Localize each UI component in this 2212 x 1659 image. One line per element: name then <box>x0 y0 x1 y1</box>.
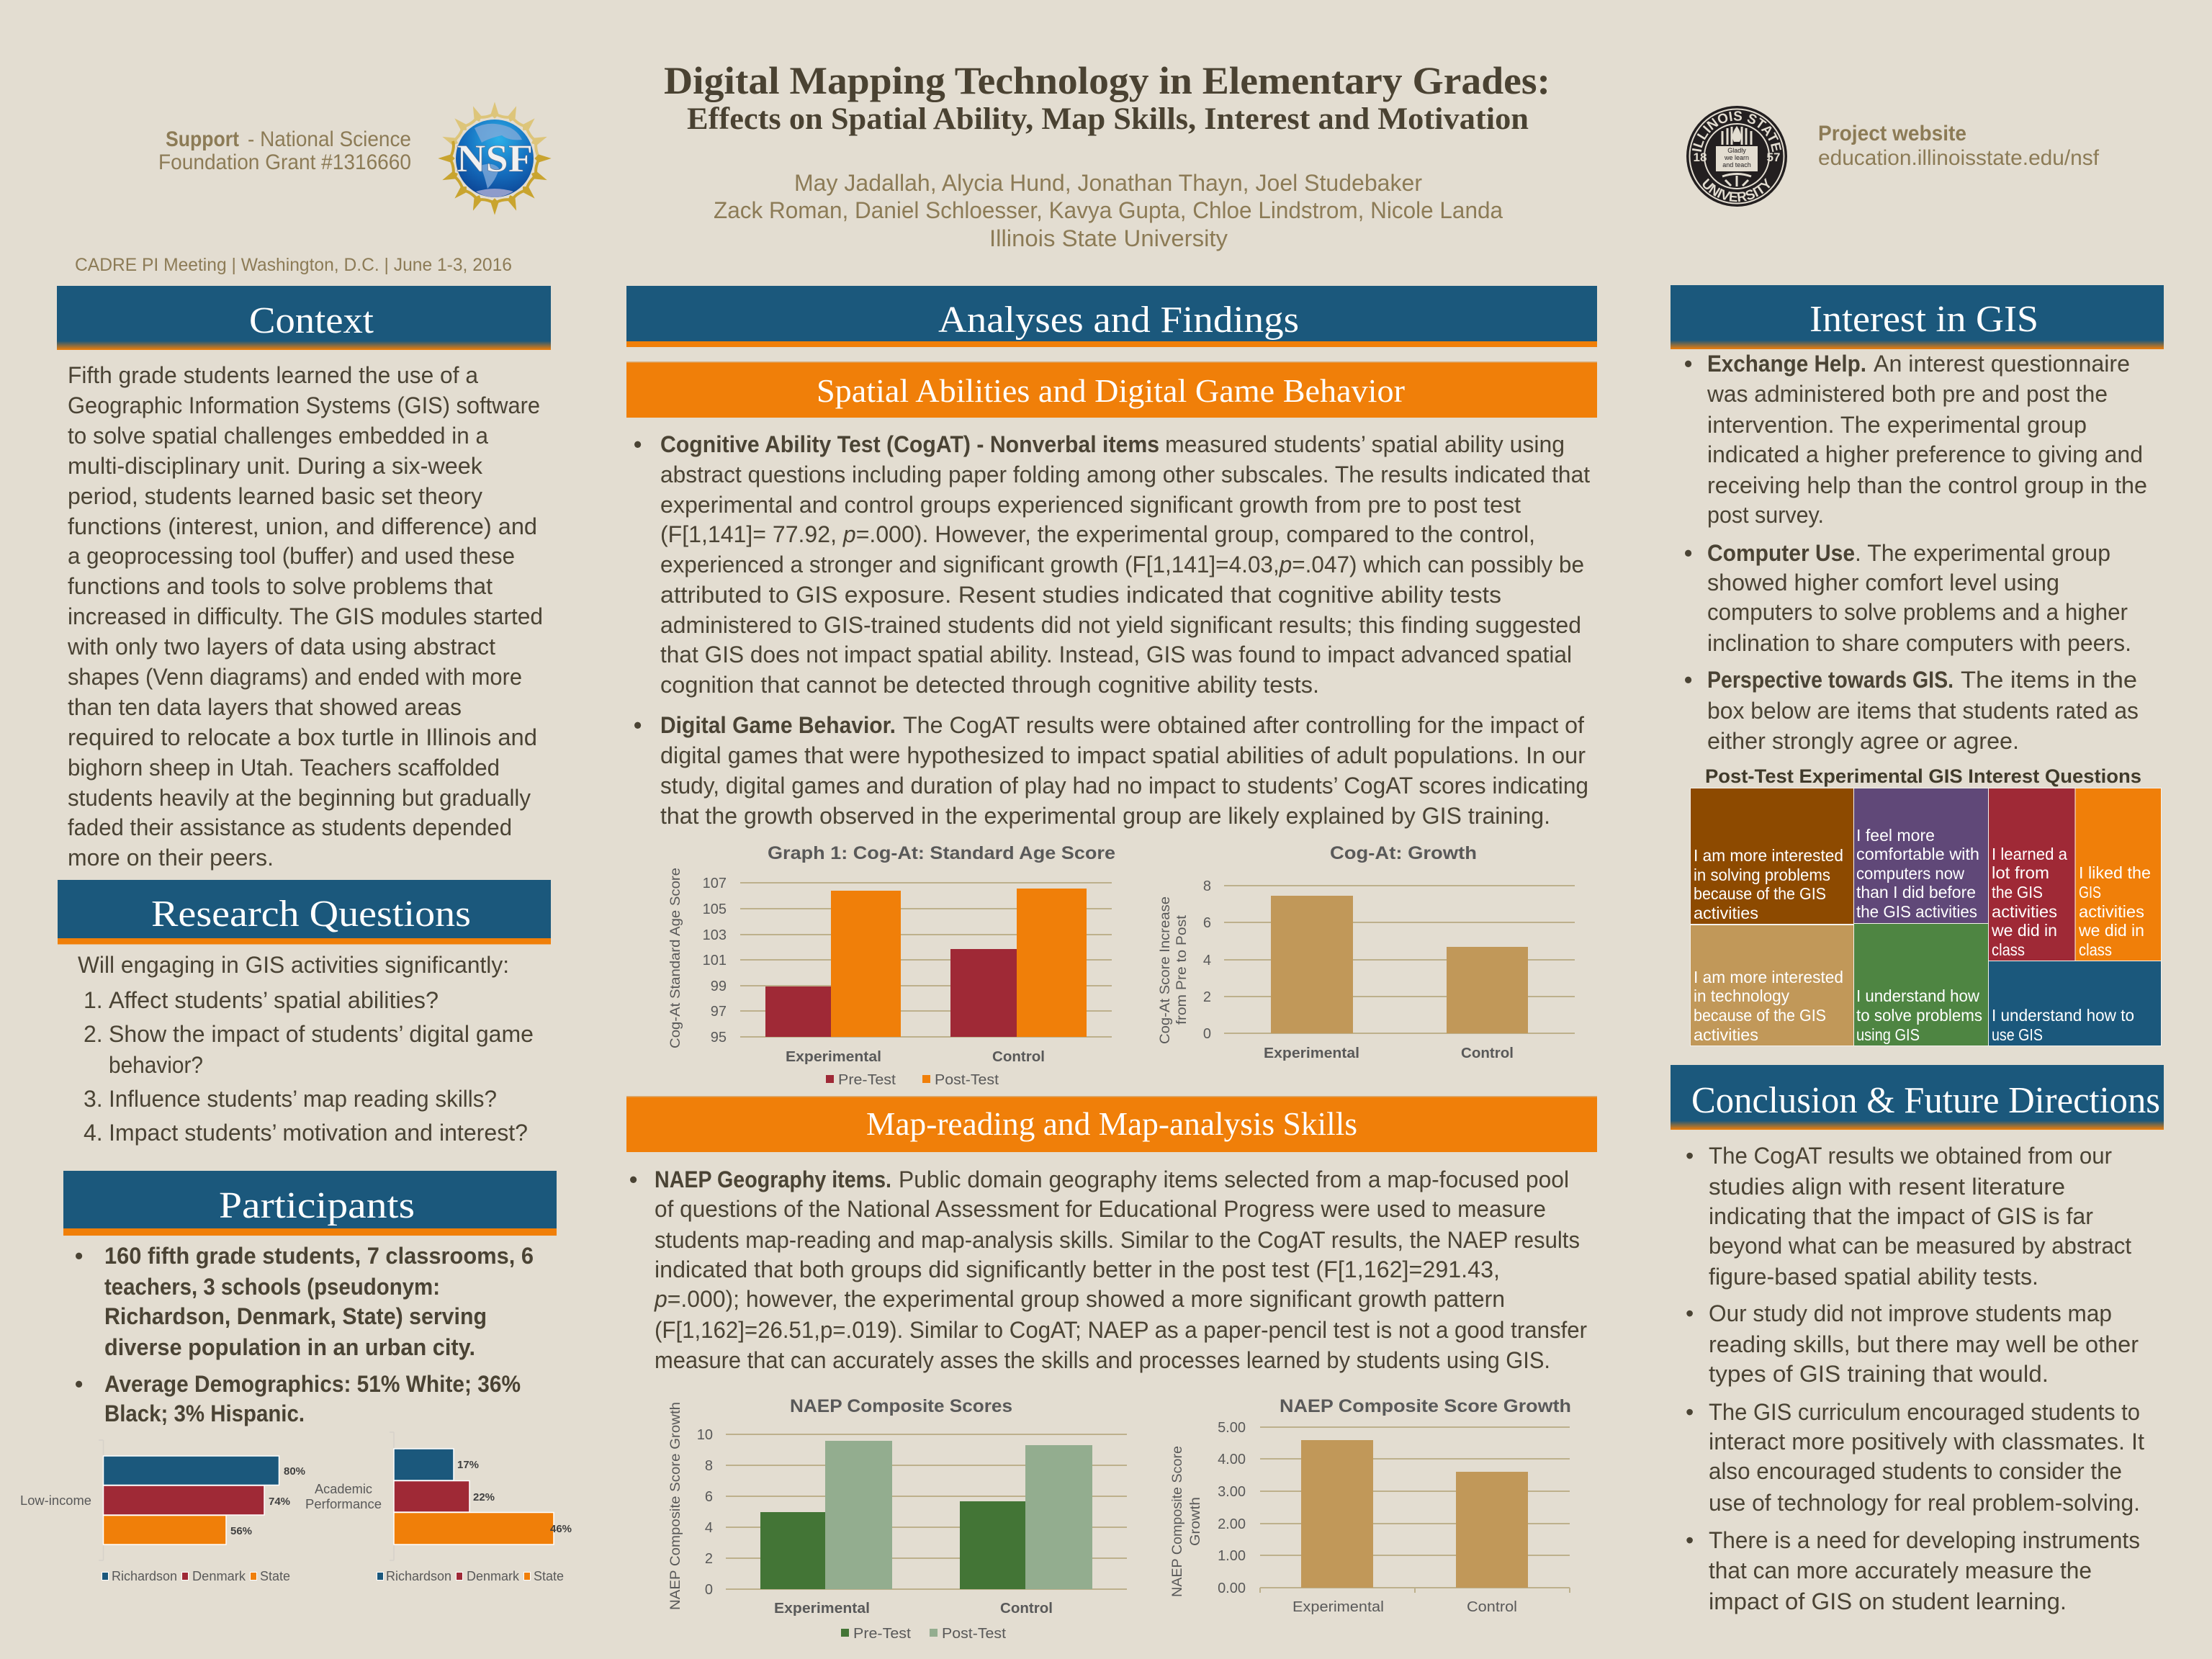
legend: State <box>260 1569 290 1583</box>
text block: cognitive ability test: (F[1,141]= 77.92, p=.000). However, the experimental group, compared to the control, <box>660 521 1535 547</box>
panel: analyses and findings <box>626 286 1597 1642</box>
text block: NAEP geography items: measure that can accurately asses the skills and processes learned by students using GIS. <box>655 1347 1550 1373</box>
heading: participants <box>63 1171 557 1236</box>
bar chart: academic performance: 17% <box>457 1459 479 1471</box>
text block: exchange help: Exchange Help. <box>1707 351 1866 377</box>
bar chart: NAEP composite score growth: 0.00 <box>1218 1581 1246 1596</box>
text block: perspective towards GIS: box below are items that students rated as <box>1707 698 2139 724</box>
bar chart: NAEP composite scores: 4 <box>705 1520 713 1536</box>
text block: questions list: 3. <box>84 1086 103 1112</box>
text block: context: required to relocate a box turtle in Illinois and <box>68 724 537 750</box>
text block: conclusion bullets: The GIS curriculum encouraged students to <box>1709 1399 2140 1425</box>
heading: participants: Participants <box>219 1185 415 1226</box>
text block: computer use: . The experimental group <box>1855 540 2110 566</box>
bar chart: NAEP composite scores: NAEP Composite Scores <box>790 1396 1012 1416</box>
text block: context: Fifth grade students learned the use of a <box>68 362 478 388</box>
text block: cognitive ability test: attributed to GIS exposure. Resent studies indicated that cognitive ability tests <box>660 582 1501 608</box>
treemap cell: technology <box>1691 925 1853 1046</box>
text: NSF support <box>158 127 411 174</box>
legend: Pre-Test <box>853 1626 911 1642</box>
bar chart: academic performance: Academic <box>315 1482 372 1496</box>
panel: participants <box>20 1171 572 1583</box>
text block: participant bullets: Richardson, Denmark, State) serving <box>104 1303 487 1329</box>
heading: context <box>57 286 551 350</box>
bar chart: Cog-At growth: from Pre to Post <box>1174 914 1190 1025</box>
text block: NAEP geography items: of questions of the National Assessment for Educational Progress were used to measure <box>655 1196 1546 1222</box>
title: Digital Mapping Technology in Elementary Grades: <box>664 59 1550 102</box>
text block: perspective towards GIS: The items in the <box>1961 667 2137 693</box>
text block: participant bullets: • <box>75 1243 83 1269</box>
heading: interest in GIS: Interest in GIS <box>1809 299 2038 340</box>
bar chart: NAEP composite scores: Control <box>1000 1601 1053 1617</box>
text block: conclusion bullets: • <box>1686 1527 1694 1553</box>
subheading: spatial abilities <box>626 361 1597 418</box>
text block: computer use: • <box>1684 540 1692 566</box>
text block: context: with only two layers of data using abstract <box>67 634 495 660</box>
bar chart: NAEP composite score growth: 4.00 <box>1218 1452 1246 1467</box>
icon: NSF logo: NSF <box>457 137 533 180</box>
text block: conclusion bullets: use of technology for real problem-solving. <box>1709 1490 2140 1516</box>
legend <box>377 1569 564 1583</box>
text block: questions list: Influence students’ map reading skills? <box>109 1086 497 1112</box>
bar chart: low-income: Low-income <box>20 1493 91 1508</box>
text block: participant bullets: 160 fifth grade students, 7 classrooms, 6 <box>104 1243 534 1269</box>
legend: Denmark <box>467 1569 520 1583</box>
subtitle: Effects on Spatial Ability, Map Skills, Interest and Motivation <box>687 102 1529 136</box>
text block: questions list: Will engaging in GIS activities significantly: <box>78 952 509 978</box>
text block: perspective towards GIS <box>1684 667 2139 754</box>
subheading: spatial abilities: Spatial Abilities and Digital Game Behavior <box>817 372 1405 409</box>
treemap cell: liked the activities: we did in <box>2078 921 2144 940</box>
text block: conclusion bullets: Our study did not improve students map <box>1709 1300 2112 1326</box>
text block: digital game behavior: Digital Game Behavior. <box>660 712 896 738</box>
bar chart: NAEP composite score growth: NAEP Composite Score Growth <box>1280 1396 1571 1416</box>
heading: context: Context <box>249 300 374 341</box>
text block: perspective towards GIS: either strongly agree or agree. <box>1707 728 2019 754</box>
heading: analyses and findings <box>626 286 1597 347</box>
subheading: map-reading skills: Map-reading and Map-analysis Skills <box>866 1105 1357 1142</box>
title block <box>664 59 1550 251</box>
heading: research questions: Research Questions <box>151 894 471 935</box>
bar chart: NAEP composite score growth: 5.00 <box>1218 1420 1246 1436</box>
legend: State <box>534 1569 564 1583</box>
text block: NAEP geography items: students map-reading and map-analysis skills. Similar to the CogAT results, the NAEP results <box>655 1227 1580 1253</box>
text block: exchange help: An interest questionnaire <box>1874 351 2130 377</box>
meeting line: CADRE PI Meeting | Washington, D.C. | June 1-3, 2016 <box>75 255 512 275</box>
text block: conclusion bullets: reading skills, but there may well be other <box>1709 1331 2139 1357</box>
treemap cell: understand how to solve problems: to solve problems <box>1856 1006 1982 1025</box>
treemap: post-test GIS interest questions: Post-Test Experimental GIS Interest Questions <box>1705 765 2141 787</box>
text block: exchange help: was administered both pre and post the <box>1707 381 2108 407</box>
bar chart: NAEP composite scores: 8 <box>705 1458 713 1474</box>
text block: NAEP geography items: • <box>629 1166 637 1192</box>
bar chart: academic performance: 22% <box>473 1491 495 1503</box>
text block: conclusion bullets: also encouraged students to consider the <box>1709 1458 2122 1484</box>
text block: computer use <box>1684 540 2131 656</box>
bar chart: NAEP composite scores: Experimental <box>774 1601 870 1617</box>
bar chart: NAEP composite score growth: Growth <box>1188 1497 1203 1546</box>
icon: Illinois State University seal <box>1686 106 1787 207</box>
treemap cell: understand how to use GIS: I understand how to <box>1992 1006 2134 1025</box>
bar chart: academic performance: 46% <box>550 1523 572 1535</box>
bar chart: NAEP composite scores: 6 <box>705 1489 713 1505</box>
authors: Illinois State University <box>989 225 1228 251</box>
text block: digital game behavior <box>634 712 1588 829</box>
text block: digital game behavior: The CogAT results were obtained after controlling for the impact of <box>903 712 1584 738</box>
text block: cognitive ability test: experienced a stronger and significant growth (F[1,141]=4.03,p=.047) which can possibly be <box>660 552 1584 577</box>
text block: digital game behavior: digital games that were hypothesized to impact spatial abilities of adult populations. In our <box>660 742 1586 768</box>
legend: Denmark <box>192 1569 246 1583</box>
text block: questions list: behavior? <box>109 1052 203 1078</box>
text block: cognitive ability test: Cognitive Ability Test (CogAT) - Nonverbal items <box>660 431 1159 457</box>
text block: participant bullets: diverse population in an urban city. <box>104 1334 475 1360</box>
text block: cognitive ability test: abstract questions including paper folding among other subscales. The results indicated that <box>660 462 1590 487</box>
treemap cell: liked the activities: GIS <box>2079 883 2101 902</box>
bar chart: NAEP composite scores: NAEP Composite Score Growth <box>668 1402 683 1610</box>
text block: computer use: Computer Use <box>1707 540 1855 566</box>
text block: exchange help: receiving help than the control group in the <box>1707 472 2147 498</box>
bar chart: Cog-At standard age score: 95 <box>711 1030 727 1046</box>
treemap cell: liked the activities: I liked the <box>2079 863 2151 882</box>
text block: context: period, students learned basic set theory <box>68 483 482 509</box>
text block: conclusion bullets: • <box>1686 1300 1694 1326</box>
bar chart: NAEP composite score growth: 2.00 <box>1218 1516 1246 1532</box>
treemap cell: solving problems: because of the GIS <box>1694 884 1826 903</box>
treemap cell: understand how to solve problems: I understand how <box>1856 986 1979 1005</box>
bar chart: low-income: 80% <box>284 1465 305 1478</box>
text block: participant bullets: Black; 3% Hispanic. <box>104 1401 305 1426</box>
text block: exchange help <box>1684 351 2147 528</box>
bar chart: Cog-At standard age score: 99 <box>711 979 727 994</box>
panel: research questions <box>58 880 551 1146</box>
treemap cell: technology: because of the GIS <box>1694 1006 1826 1025</box>
text block: NAEP geography items: p=.000); however, the experimental group showed a more significant growth pattern <box>654 1286 1505 1312</box>
treemap cell: learned a lot: class <box>1992 940 2025 959</box>
text block: context: more on their peers. <box>68 845 274 871</box>
text block: computer use: showed higher comfort level using <box>1707 570 2059 595</box>
bar chart: NAEP composite score growth: 3.00 <box>1218 1484 1246 1500</box>
text block: exchange help: intervention. The experimental group <box>1707 412 2087 438</box>
text: NSF support: - National Science <box>248 127 411 151</box>
text: project website <box>1818 122 2100 170</box>
text: project website: education.illinoisstate.edu/nsf <box>1818 146 2100 170</box>
treemap: post-test GIS interest questions <box>1690 765 2162 1046</box>
header: university seal and project website <box>1686 106 2100 207</box>
bar chart: Cog-At standard age score: 101 <box>703 953 727 968</box>
bar chart: Cog-At growth: Experimental <box>1264 1046 1359 1061</box>
text block: exchange help: indicated a higher preference to giving and <box>1707 441 2143 467</box>
text: project website: Project website <box>1818 122 1966 145</box>
legend: Post-Test <box>942 1626 1006 1642</box>
bar chart: Cog-At growth: 4 <box>1203 953 1211 968</box>
panel: interest in GIS <box>1671 285 2164 1046</box>
text block: context: functions and tools to solve problems that <box>68 573 493 599</box>
text block: cognitive ability test: administered to GIS-trained students did not yield significant results; this finding suggested <box>660 612 1581 638</box>
text block: conclusion bullets: • <box>1686 1143 1694 1169</box>
bar chart: Cog-At growth: Control <box>1461 1046 1514 1061</box>
legend <box>826 1072 999 1088</box>
text block: conclusion bullets: types of GIS training that would. <box>1709 1361 2049 1387</box>
bar chart: Cog-At standard age score: Control <box>992 1049 1045 1065</box>
text block: questions list: 1. <box>84 987 103 1013</box>
icon: Illinois State University seal: Gladly <box>1727 147 1746 154</box>
text block: context: to solve spatial challenges embedded in a <box>68 423 488 449</box>
treemap cell: comfortable with computers <box>1854 788 1988 923</box>
text block: context: students heavily at the beginning but gradually <box>68 785 531 811</box>
bar chart: Cog-At growth <box>1158 843 1575 1061</box>
treemap cell: understand how to use GIS <box>1989 961 2161 1046</box>
text block: questions list: 4. <box>84 1120 103 1146</box>
panel: conclusion and future directions <box>1671 1065 2164 1614</box>
text block: NAEP geography items: (F[1,162]=26.51,p=.019). Similar to CogAT; NAEP as a paper-pencil test is not a good transfer <box>655 1317 1587 1343</box>
text block: context: faded their assistance as students depended <box>68 814 512 840</box>
bar chart: Cog-At growth: 8 <box>1203 878 1211 894</box>
text block: cognitive ability test <box>634 431 1590 698</box>
heading: analyses and findings: Analyses and Findings <box>938 300 1299 341</box>
text block: context: than ten data layers that showed areas <box>68 694 462 720</box>
text block: questions list <box>78 952 534 1146</box>
treemap cell: solving problems <box>1691 788 1853 924</box>
treemap cell: comfortable with computers: I feel more <box>1856 826 1935 845</box>
bar chart: academic performance <box>305 1432 572 1583</box>
treemap cell: solving problems: I am more interested <box>1694 846 1843 865</box>
bar chart: Cog-At standard age score: 103 <box>703 927 727 943</box>
text block: perspective towards GIS: Perspective towards GIS. <box>1707 667 1954 693</box>
text block: NAEP geography items: Public domain geography items selected from a map-focused pool <box>899 1166 1569 1192</box>
text block: conclusion bullets: figure-based spatial ability tests. <box>1709 1264 2038 1290</box>
text block: conclusion bullets: interact more positively with classmates. It <box>1709 1429 2144 1455</box>
bar chart: Cog-At growth: 2 <box>1203 989 1211 1005</box>
text block: computer use: inclination to share computers with peers. <box>1707 630 2131 656</box>
bar chart: NAEP composite score growth: NAEP Composite Score <box>1170 1446 1185 1597</box>
text block: questions list: Affect students’ spatial abilities? <box>109 987 439 1013</box>
text block: cognitive ability test: cognition that cannot be detected through cognitive ability tests. <box>660 672 1319 698</box>
text block: participant bullets <box>75 1243 534 1426</box>
authors: Zack Roman, Daniel Schloesser, Kavya Gupta, Chloe Lindstrom, Nicole Landa <box>714 197 1503 223</box>
text: NSF support: Support <box>166 127 239 151</box>
text block: context: shapes (Venn diagrams) and ended with more <box>68 664 522 690</box>
bar chart: Cog-At standard age score: Experimental <box>786 1049 881 1065</box>
text block: NAEP geography items <box>629 1166 1587 1373</box>
text block: digital game behavior: that the growth observed in the experimental group are likely explained by GIS training. <box>660 803 1550 829</box>
treemap cell: learned a lot <box>1989 788 2075 961</box>
treemap cell: understand how to solve problems: using GIS <box>1856 1025 1920 1044</box>
header: support and NSF logo <box>158 101 552 216</box>
icon: Illinois State University seal: 18 <box>1694 150 1707 164</box>
treemap cell: solving problems: in solving problems <box>1694 866 1830 884</box>
icon: NSF logo <box>437 101 552 216</box>
icon: Illinois State University seal: and teach <box>1722 161 1751 168</box>
treemap cell: liked the activities: class <box>2079 940 2112 959</box>
authors <box>714 170 1503 251</box>
bar chart: low-income: 56% <box>230 1525 252 1537</box>
bar chart: Cog-At growth: 6 <box>1203 915 1211 931</box>
authors: May Jadallah, Alycia Hund, Jonathan Thayn, Joel Studebaker <box>794 170 1422 196</box>
icon: Illinois State University seal: 57 <box>1767 150 1780 164</box>
bar chart: NAEP composite scores <box>668 1396 1127 1642</box>
text block: conclusion bullets: indicating that the impact of GIS is far <box>1709 1203 2093 1229</box>
subheading: map-reading skills <box>626 1096 1597 1152</box>
icon: Illinois State University seal: ILLINOIS STATE <box>1692 111 1781 153</box>
bar chart: Cog-At standard age score: 105 <box>703 902 727 917</box>
bar chart: low-income <box>20 1440 305 1583</box>
text block: NAEP geography items: indicated that both groups did significantly better in the post test (F[1,162]=291.43, <box>655 1256 1500 1282</box>
legend: Richardson <box>386 1569 451 1583</box>
text block: conclusion bullets: • <box>1686 1399 1694 1425</box>
text block: conclusion bullets: There is a need for developing instruments <box>1709 1527 2140 1553</box>
text block: digital game behavior: study, digital games and duration of play had no impact to students’ CogAT scores indicating <box>660 773 1588 799</box>
text block: questions list: 2. <box>84 1021 103 1047</box>
text block: conclusion bullets: The CogAT results we obtained from our <box>1709 1143 2112 1169</box>
heading: conclusion: Conclusion & Future Directions <box>1691 1080 2160 1121</box>
bar chart: NAEP composite score growth: Experimental <box>1292 1599 1384 1615</box>
text: NSF support: Foundation Grant #1316660 <box>158 150 411 174</box>
text block: questions list: Show the impact of students’ digital game <box>109 1021 534 1047</box>
icon: Illinois State University seal: UNIVERSITY <box>1702 178 1770 202</box>
panel: context <box>57 286 551 871</box>
legend <box>841 1626 1006 1642</box>
treemap cell: understand how to solve problems <box>1854 924 1988 1046</box>
bar chart: Cog-At growth: Cog-At: Growth <box>1330 843 1477 863</box>
text block: computer use: computers to solve problems and a higher <box>1707 599 2128 625</box>
text block: participant bullets: • <box>75 1371 83 1397</box>
bar chart: NAEP composite scores: 2 <box>705 1551 713 1567</box>
text block: conclusion bullets: beyond what can be measured by abstract <box>1709 1233 2131 1259</box>
heading: interest in GIS <box>1671 285 2164 349</box>
text block: cognitive ability test: that GIS does not impact spatial ability. Instead, GIS was found to impact advanced spatial <box>660 642 1572 667</box>
treemap cell: learned a lot: we did in <box>1991 921 2057 940</box>
bar chart: NAEP composite score growth: Control <box>1467 1599 1517 1615</box>
text block: exchange help: post survey. <box>1707 502 1824 528</box>
text block: digital game behavior: • <box>634 712 642 738</box>
bar chart: academic performance: Performance <box>305 1497 382 1511</box>
treemap cell: technology: activities <box>1694 1025 1758 1044</box>
text block: participant bullets: teachers, 3 schools (pseudonym: <box>104 1274 440 1300</box>
heading: research questions <box>58 880 551 945</box>
text block: cognitive ability test: • <box>634 431 642 457</box>
bar chart: low-income: 74% <box>269 1496 290 1508</box>
text block: context: bighorn sheep in Utah. Teachers scaffolded <box>68 755 500 781</box>
treemap cell: learned a lot: the GIS <box>1992 883 2043 902</box>
treemap cell: comfortable with computers: computers now <box>1856 864 1964 883</box>
text block: context: functions (interest, union, and difference) and <box>68 513 537 539</box>
treemap cell: technology: I am more interested <box>1694 968 1843 986</box>
treemap cell: learned a lot: lot from <box>1992 863 2049 882</box>
text block: questions list: Impact students’ motivation and interest? <box>109 1120 528 1146</box>
text block: context: multi-disciplinary unit. During a six-week <box>68 453 483 479</box>
bar chart: NAEP composite scores: 10 <box>697 1427 713 1443</box>
treemap cell: liked the activities: activities <box>2079 902 2144 921</box>
treemap cell: liked the activities <box>2075 788 2161 961</box>
legend: Richardson <box>112 1569 177 1583</box>
text block: cognitive ability test: experimental and control groups experienced significant growth from pre to post test <box>660 492 1521 518</box>
bar chart: Cog-At standard age score: 107 <box>703 876 727 891</box>
bar chart: Cog-At standard age score: Graph 1: Cog-At: Standard Age Score <box>768 843 1115 863</box>
treemap cell: understand how to use GIS: use GIS <box>1992 1025 2043 1044</box>
bar chart: Cog-At standard age score: 97 <box>711 1004 727 1020</box>
text block: exchange help: • <box>1684 351 1692 377</box>
text block: conclusion bullets: impact of GIS on student learning. <box>1709 1588 2067 1614</box>
bar chart: Cog-At standard age score <box>668 843 1115 1088</box>
text block: conclusion bullets <box>1686 1143 2144 1614</box>
text block: context: Geographic Information Systems (GIS) software <box>68 392 540 418</box>
treemap cell: comfortable with computers: comfortable with <box>1856 845 1979 863</box>
text block: cognitive ability test: measured students’ spatial ability using <box>1165 431 1565 457</box>
legend <box>102 1569 290 1583</box>
text block: conclusion bullets: that can more accurately measure the <box>1709 1557 2092 1583</box>
bar chart: Cog-At standard age score: Cog-At Standard Age Score <box>668 868 683 1048</box>
bar chart: NAEP composite score growth <box>1170 1396 1571 1615</box>
icon: Illinois State University seal: we learn <box>1724 154 1749 161</box>
treemap cell: comfortable with computers: than I did before <box>1856 883 1976 902</box>
bar chart: NAEP composite scores: 0 <box>705 1582 713 1598</box>
bar chart: Cog-At growth: 0 <box>1203 1026 1211 1042</box>
text block: NAEP geography items: NAEP Geography items. <box>655 1166 891 1192</box>
text block: context <box>67 362 543 871</box>
treemap cell: learned a lot: activities <box>1992 902 2057 921</box>
text block: perspective towards GIS: • <box>1684 667 1692 693</box>
heading: conclusion <box>1671 1065 2164 1130</box>
text block: context: increased in difficulty. The GIS modules started <box>68 603 543 629</box>
bar chart: Cog-At growth: Cog-At Score Increase <box>1158 896 1173 1044</box>
text block: context: a geoprocessing tool (buffer) and used these <box>68 543 515 569</box>
legend: Pre-Test <box>838 1072 896 1088</box>
treemap cell: learned a lot: I learned a <box>1992 845 2067 863</box>
treemap cell: technology: in technology <box>1694 986 1789 1005</box>
legend: Post-Test <box>935 1072 999 1088</box>
treemap cell: comfortable with computers: the GIS activities <box>1856 902 1977 921</box>
text block: conclusion bullets: studies align with resent literature <box>1709 1174 2065 1200</box>
treemap cell: solving problems: activities <box>1694 904 1758 922</box>
bar chart: NAEP composite score growth: 1.00 <box>1218 1548 1246 1564</box>
text block: participant bullets: Average Demographics: 51% White; 36% <box>104 1371 521 1397</box>
